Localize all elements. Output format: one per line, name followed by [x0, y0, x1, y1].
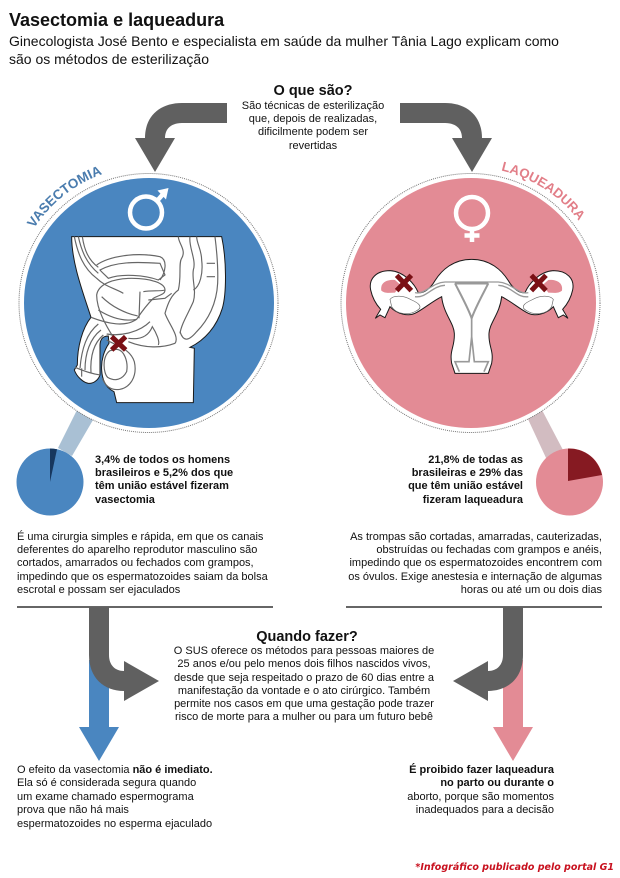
text: when: [174, 645, 434, 723]
text: vasectomy note: O efeito da vasectomia não é imediato.: [17, 764, 213, 776]
text: vasectomy note: um exame chamado espermograma: [17, 791, 194, 803]
text: vasectomy note: prova que não há mais: [17, 804, 129, 816]
text: men statistic: [95, 454, 233, 506]
text: when: manifestação da vontade e o ato cirúrgico. Também: [178, 685, 430, 697]
text: vasectomy note: [17, 764, 213, 830]
text: tubal ligation note: inadequados para a decisão: [416, 804, 554, 816]
arrow: blue down: [79, 660, 119, 761]
panel: tubal ligation circle: [341, 174, 600, 432]
divider right: [346, 606, 602, 608]
text: men statistic: têm união estável fizeram: [95, 480, 229, 492]
text: tubal ligation description: As trompas são cortadas, amarradas, cauterizadas,: [350, 531, 602, 543]
text: men statistic: brasileiros e 5,2% dos que: [95, 467, 233, 479]
title: Vasectomia e laqueadura: [9, 10, 224, 30]
text: tubal ligation note: [407, 763, 554, 816]
icon: female symbol: [456, 197, 488, 242]
icon: male symbol: [130, 188, 168, 228]
text: vasectomy note: espermatozoides no esperma ejaculado: [17, 818, 212, 830]
text: women statistic: 21,8% de todas as: [428, 454, 523, 466]
text: when: 25 anos e/ou pelo menos dois filhos nascidos vivos,: [177, 658, 431, 670]
heading: Quando fazer?: Quando fazer?: [256, 629, 358, 645]
text: definition: São técnicas de esterilização: [242, 100, 384, 112]
connector: right circle to pie: [527, 410, 563, 460]
arrow: top right: [400, 103, 492, 172]
text: vasectomy note: Ela só é considerada segura quando: [17, 777, 196, 789]
text: tubal ligation description: horas ou até um ou dois dias: [461, 584, 602, 596]
arrow: bottom left gray: [89, 607, 159, 701]
text: vasectomy description: deferentes do aparelho reprodutor masculino são: [17, 544, 257, 556]
text: women statistic: [408, 454, 524, 506]
text: tubal ligation note: no parto ou durante o: [440, 777, 554, 789]
text: tubal ligation description: impedindo que os espermatozoides encontrem com: [349, 557, 602, 569]
text: definition: revertidas: [289, 140, 337, 152]
arrow: bottom right gray: [453, 607, 523, 701]
text: vasectomy description: [17, 530, 268, 596]
text: tubal ligation note: É proibido fazer laqueadura: [409, 764, 554, 776]
text: definition: [242, 100, 384, 152]
text: when: O SUS oferece os métodos para pessoas maiores de: [174, 645, 434, 657]
source credit: *Infográfico publicado pelo portal G1: [415, 862, 614, 873]
label: LAQUEADURA: LAQUEADURA: [502, 162, 584, 220]
panel: vasectomy circle: [19, 174, 278, 432]
text: vasectomy description: É uma cirurgia simples e rápida, em que os canais: [17, 531, 263, 543]
label: VASECTOMIA: VASECTOMIA: [26, 166, 102, 226]
pie chart: men: [16, 448, 84, 516]
subtitle: Ginecologista José Bento e especialista em saúde da mulher Tânia Lago explicam como: [9, 33, 559, 49]
heading: O que são?: O que são?: [274, 83, 352, 99]
text: when: desde que seja respeitado o prazo de 60 dias entre a: [174, 672, 434, 684]
icon: red crosses: [397, 275, 546, 291]
text: women statistic: brasileiras e 29% das: [412, 467, 523, 479]
text: definition: dificilmente podem ser: [258, 126, 368, 138]
text: tubal ligation description: os óvulos. Exige anestesia e internação de algumas: [348, 571, 602, 583]
text: tubal ligation description: obstruídas ou fechadas com grampos e anéis,: [376, 544, 602, 556]
text: men statistic: vasectomia: [95, 494, 155, 506]
arrow: top left: [135, 103, 227, 172]
arrow: pink down: [493, 660, 533, 761]
text: tubal ligation note: aborto, porque são momentos: [407, 791, 554, 803]
icon: red cross: [112, 337, 126, 350]
connector: left circle to pie: [58, 410, 93, 456]
tube openings: [381, 280, 562, 293]
divider left: [17, 606, 273, 608]
illustration: male reproductive system: [72, 237, 225, 403]
text: vasectomy description: cortados, amarrados ou fechados com grampos,: [17, 557, 254, 569]
text: when: permite nos casos em que uma gestação pode trazer: [174, 698, 434, 710]
illustration: female reproductive system: [370, 259, 573, 373]
pie chart: women: [536, 448, 603, 516]
text: vasectomy description: escrotal e possam ser ejaculados: [17, 584, 180, 596]
text: definition: que, depois de realizadas,: [249, 113, 377, 125]
text: when: risco de morte para a mulher ou para um futuro bebê: [175, 711, 433, 723]
subtitle: são os métodos de esterilização: [9, 51, 209, 67]
text: women statistic: que têm união estável: [408, 480, 523, 492]
text: vasectomy description: impedindo que os espermatozoides saiam da bolsa: [17, 571, 268, 583]
subtitle: [9, 33, 559, 67]
text: women statistic: fizeram laqueadura: [423, 494, 523, 506]
text: men statistic: 3,4% de todos os homens: [95, 454, 230, 466]
text: tubal ligation description: [348, 531, 602, 596]
